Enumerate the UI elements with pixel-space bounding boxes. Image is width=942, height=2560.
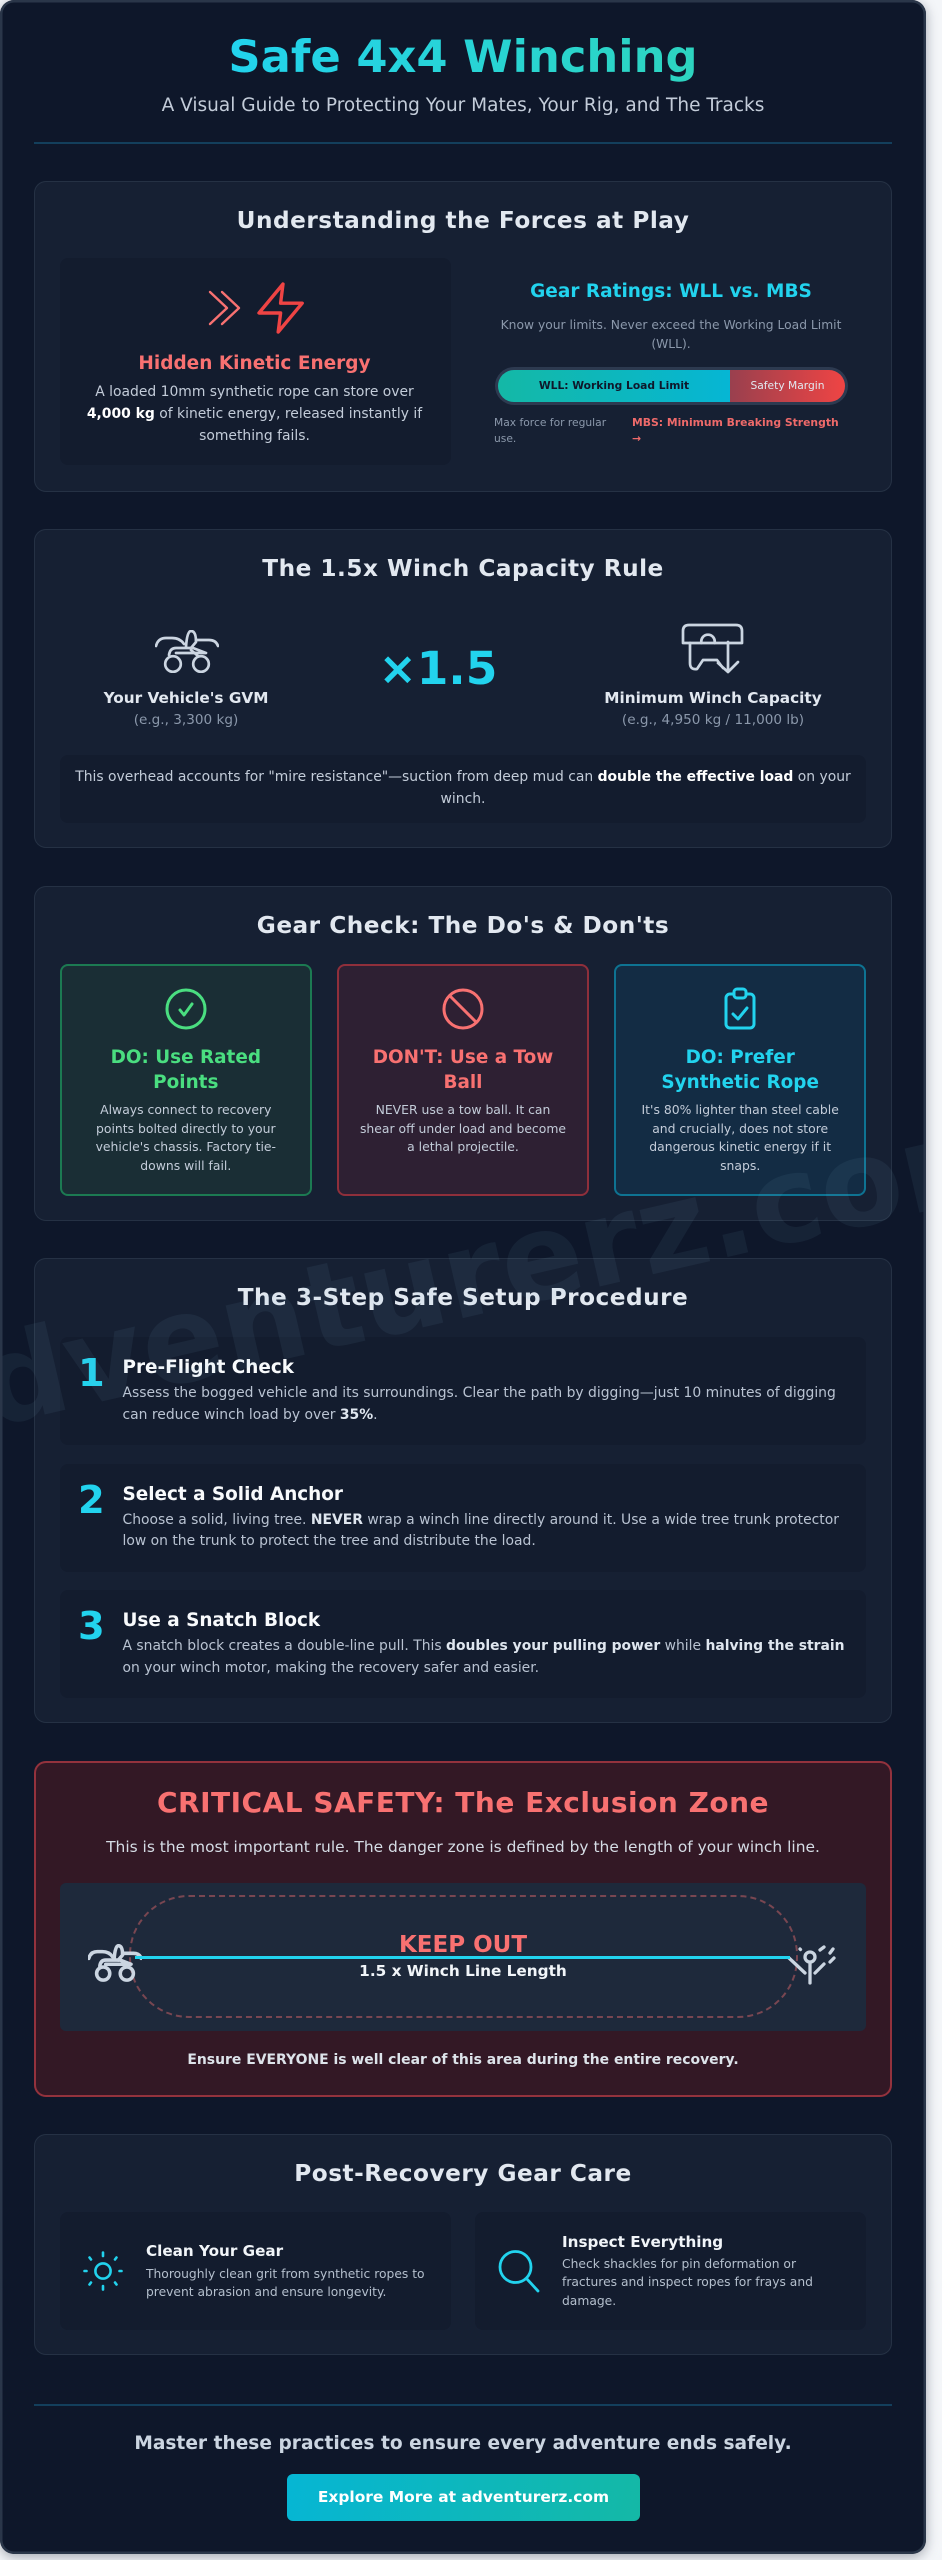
number: 1 <box>78 1351 105 1396</box>
step 2 <box>60 1464 866 1572</box>
step text <box>122 1385 836 1423</box>
card text: It's 80% lighter than steel cable <box>642 1102 839 1117</box>
text block <box>87 384 422 444</box>
card text <box>146 2267 425 2299</box>
icon: check circle <box>166 988 206 1030</box>
button: Explore More at adventurerz.com <box>318 2488 609 2506</box>
card text: and crucially, does not store <box>652 1121 828 1136</box>
number: 2 <box>78 1478 105 1522</box>
icon: vehicle <box>88 1944 142 1982</box>
icon: chevrons and lightning bolt <box>208 282 304 334</box>
icon: magnifier <box>498 2250 540 2292</box>
card text <box>642 1102 839 1173</box>
heading: Post-Recovery Gear Care <box>294 2160 632 2186</box>
subtitle: A Visual Guide to Protecting Your Mates, Your Rig, and The Tracks <box>162 94 764 116</box>
segment: safety margin: Safety Margin <box>750 379 825 392</box>
step text: can reduce winch load by over 35%. <box>122 1407 378 1423</box>
card text: snaps. <box>720 1158 760 1173</box>
card: synthetic rope <box>614 964 866 1196</box>
icon: tree anchor <box>788 1945 836 1985</box>
card text <box>562 2257 813 2308</box>
text block: 4,000 kg of kinetic energy, released instantly if <box>87 406 422 422</box>
text block: Know your limits. Never exceed the Working Load Limit <box>501 318 841 332</box>
panel: do's and don'ts <box>34 886 892 1221</box>
card heading: Points <box>153 1072 218 1092</box>
card text: NEVER use a tow ball. It can <box>376 1102 550 1117</box>
warning text: Ensure EVERYONE is well clear of this area during the entire recovery. <box>187 2052 739 2068</box>
label: max force <box>494 416 606 445</box>
text block: This overhead accounts for "mire resistance"—suction from deep mud can double the effective load on your <box>75 769 851 785</box>
label: MBS: MBS: Minimum Breaking Strength <box>632 416 839 429</box>
card: inspect <box>475 2212 866 2330</box>
label: keep out: KEEP OUT <box>399 1932 527 1958</box>
label: MBS <box>632 416 839 445</box>
heading: CRITICAL SAFETY: The Exclusion Zone <box>157 1786 769 1819</box>
exclusion diagram <box>60 1883 866 2031</box>
card title: Clean Your Gear <box>146 2242 283 2260</box>
card heading: Ball <box>443 1072 482 1092</box>
icon: vehicle <box>155 630 219 673</box>
bar: WLL vs safety margin <box>495 367 848 405</box>
card text: damage. <box>562 2294 616 2308</box>
step 3 <box>60 1590 866 1698</box>
icon: clipboard check <box>724 988 756 1030</box>
card heading: Synthetic Rope <box>661 1072 819 1092</box>
card heading <box>373 1047 553 1092</box>
heading: The 1.5x Winch Capacity Rule <box>262 554 664 582</box>
multiplier: ×1.5 <box>379 642 497 695</box>
step text: Assess the bogged vehicle and its surroundings. Clear the path by digging—just 10 minutes of digging <box>122 1385 836 1401</box>
panel: gear care <box>34 2134 892 2355</box>
step text: low on the trunk to protect the tree and distribute the load. <box>122 1533 536 1549</box>
label: line length: 1.5 x Winch Line Length <box>359 1962 567 1980</box>
card text: fractures and inspect ropes for frays and <box>562 2275 813 2289</box>
step text <box>122 1638 845 1676</box>
card heading <box>111 1047 261 1092</box>
card text <box>96 1102 276 1173</box>
step text: Choose a solid, living tree. NEVER wrap a winch line directly around it. Use a wide tree trunk protector <box>122 1512 839 1528</box>
heading: Gear Check: The Do's & Don'ts <box>257 912 669 938</box>
card text: vehicle's chassis. Factory tie- <box>96 1139 276 1154</box>
card heading: DO: Prefer <box>686 1047 795 1068</box>
title: Safe 4x4 Winching <box>228 30 698 82</box>
text block <box>501 318 842 350</box>
card: clean gear <box>60 2212 451 2330</box>
heading: hidden kinetic energy: Hidden Kinetic Energy <box>138 353 371 374</box>
label: capacity example: (e.g., 4,950 kg / 11,000 lb) <box>622 712 804 728</box>
label: winch capacity: Minimum Winch Capacity <box>604 689 822 707</box>
card heading: DON'T: Use a Tow <box>373 1047 553 1068</box>
step text <box>122 1512 839 1549</box>
keep-out zone <box>129 1895 798 2018</box>
winch line <box>135 1956 790 1959</box>
segment: safety margin <box>730 370 845 402</box>
step title: Use a Snatch Block <box>122 1610 320 1631</box>
card heading: DO: Use Rated <box>111 1047 261 1068</box>
card text <box>360 1102 566 1154</box>
step title: Select a Solid Anchor <box>122 1484 343 1504</box>
segment: WLL: WLL: Working Load Limit <box>539 379 689 392</box>
step 1 <box>60 1337 866 1445</box>
text block: A loaded 10mm synthetic rope can store over <box>95 384 414 400</box>
card text: Check shackles for pin deformation or <box>562 2257 796 2271</box>
label: max force: Max force for regular <box>494 416 606 429</box>
card text: Always connect to recovery <box>100 1102 271 1117</box>
card text: dangerous kinetic energy if it <box>649 1139 831 1154</box>
panel: setup procedure <box>34 1258 892 1723</box>
icon: winch <box>682 624 744 674</box>
footer message: Master these practices to ensure every adventure ends safely. <box>134 2433 792 2454</box>
icon: ban <box>442 988 484 1030</box>
panel: forces at play <box>34 181 892 492</box>
card text: shear off under load and become <box>360 1121 566 1136</box>
segment: WLL <box>498 370 730 402</box>
card title: Inspect Everything <box>562 2233 723 2251</box>
heading: The 3-Step Safe Setup Procedure <box>238 1284 688 1310</box>
label: MBS: → <box>632 432 641 445</box>
number: 3 <box>78 1604 105 1649</box>
text block: winch. <box>441 791 485 807</box>
note: mire resistance <box>60 755 866 823</box>
panel: exclusion zone <box>34 1761 892 2097</box>
text block: something fails. <box>199 428 310 444</box>
icon: sun <box>83 2251 123 2291</box>
step text: A snatch block creates a double-line pull. This doubles your pulling power while halving the strain <box>122 1638 845 1654</box>
card text: points bolted directly to your <box>96 1121 276 1136</box>
card text: a lethal projectile. <box>407 1139 519 1154</box>
step title: Pre-Flight Check <box>122 1357 294 1378</box>
card text: prevent abrasion and ensure longevity. <box>146 2285 386 2299</box>
heading: Understanding the Forces at Play <box>237 206 689 234</box>
label: max force: use. <box>494 432 516 445</box>
text block: This is the most important rule. The danger zone is defined by the length of your winch line. <box>106 1838 820 1856</box>
heading: gear ratings: Gear Ratings: WLL vs. MBS <box>530 281 812 302</box>
card heading <box>661 1047 819 1092</box>
step text: on your winch motor, making the recovery safer and easier. <box>122 1660 539 1676</box>
text block <box>75 769 851 807</box>
panel: capacity rule <box>34 529 892 848</box>
card: rated points <box>60 964 312 1196</box>
button <box>287 2474 640 2521</box>
text block: (WLL). <box>651 336 691 350</box>
card text: downs will fail. <box>140 1158 231 1173</box>
panel: hidden kinetic energy <box>60 258 451 465</box>
card text: Thoroughly clean grit from synthetic ropes to <box>146 2267 425 2281</box>
card: tow ball <box>337 964 589 1196</box>
label: GVM example: (e.g., 3,300 kg) <box>134 712 238 728</box>
label: vehicle GVM: Your Vehicle's GVM <box>104 689 268 707</box>
